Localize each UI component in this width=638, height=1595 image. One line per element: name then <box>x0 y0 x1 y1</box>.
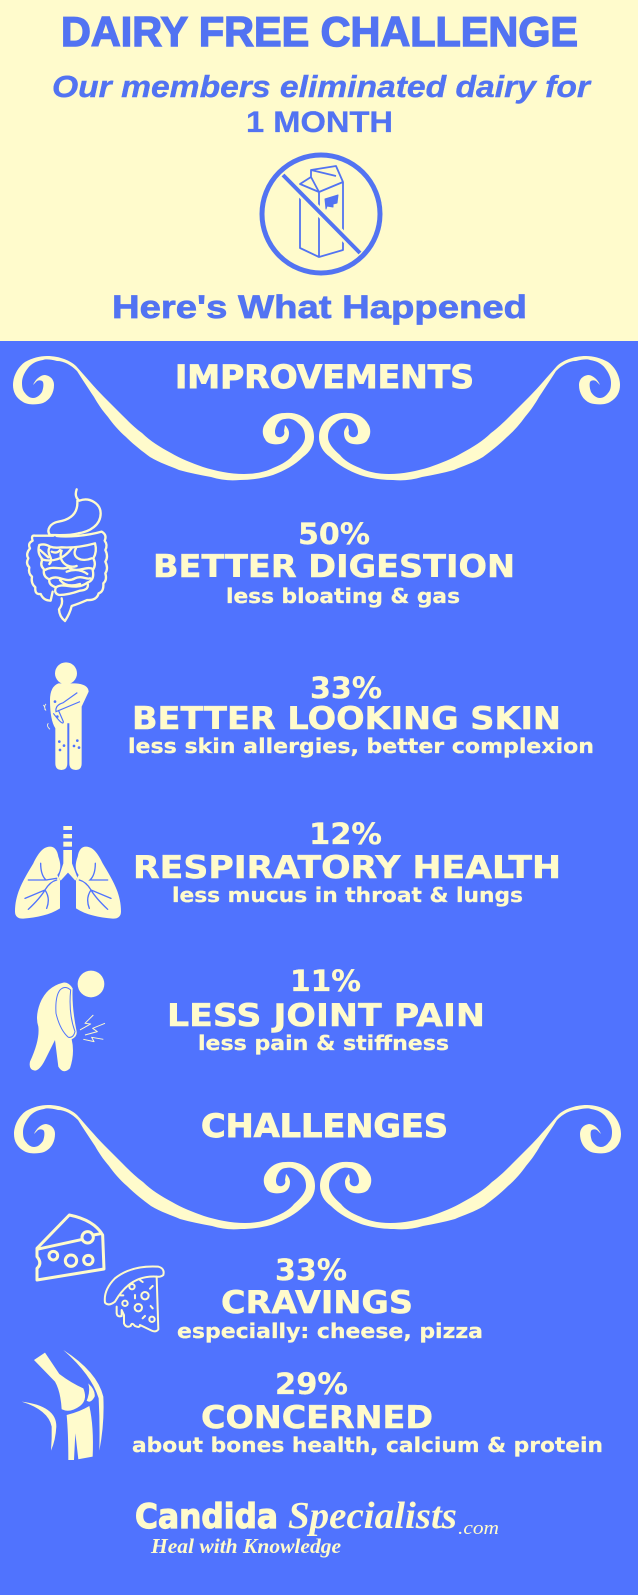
ornament: improvements left scroll <box>13 356 314 480</box>
percentage: 12% <box>309 817 382 851</box>
logo <box>135 1495 499 1558</box>
description: especially: cheese, pizza <box>177 1319 483 1343</box>
icon: cheese <box>37 1215 104 1280</box>
description: less bloating & gas <box>226 584 460 608</box>
heading: challenges: CHALLENGES <box>201 1107 448 1145</box>
label: RESPIRATORY HEALTH <box>133 850 561 886</box>
subheading: Here's What Happened <box>112 289 527 325</box>
icon: pizza <box>105 1266 164 1331</box>
label: CONCERNED <box>201 1400 433 1436</box>
logo: candida: Candida <box>135 1497 278 1537</box>
percentage: 29% <box>275 1367 348 1401</box>
ornament: challenges right scroll <box>320 1105 621 1229</box>
duration: 1 MONTH <box>246 106 393 139</box>
percentage: 33% <box>310 671 382 705</box>
panel: header <box>0 0 638 341</box>
panel: respiratory <box>15 817 561 919</box>
icon: knee joint <box>22 1350 104 1460</box>
panel: digestion <box>27 489 515 621</box>
icon: lungs <box>15 826 121 919</box>
ornament: improvements right scroll <box>319 356 620 480</box>
logo: specialists: Specialists <box>288 1495 457 1537</box>
panel: concerned <box>22 1350 603 1460</box>
icon: person with skin irritation <box>43 662 89 770</box>
panel: skin <box>43 662 594 770</box>
heading: improvements: IMPROVEMENTS <box>175 358 474 396</box>
description: less mucus in throat & lungs <box>172 883 523 907</box>
label: CRAVINGS <box>221 1285 413 1321</box>
label: LESS JOINT PAIN <box>167 998 485 1034</box>
icon: intestines <box>27 489 107 621</box>
panel: cravings <box>37 1215 483 1343</box>
ornament: challenges left scroll <box>14 1105 315 1229</box>
icon: no milk carton <box>262 155 380 273</box>
panel: joint pain <box>30 964 485 1071</box>
logo: domain: .com <box>458 1518 499 1539</box>
percentage: 11% <box>290 964 361 998</box>
icon: person with back pain <box>30 971 105 1071</box>
description: less pain & stiffness <box>198 1031 449 1055</box>
percentage: 33% <box>275 1253 347 1287</box>
description: less skin allergies, better complexion <box>128 734 594 758</box>
percentage: 50% <box>298 517 370 551</box>
description: about bones health, calcium & protein <box>132 1433 603 1457</box>
title: DAIRY FREE CHALLENGE <box>61 8 578 55</box>
label: BETTER LOOKING SKIN <box>132 701 561 737</box>
logo: tagline: Heal with Knowledge <box>150 1534 341 1558</box>
subtitle: Our members eliminated dairy for <box>52 69 592 104</box>
label: BETTER DIGESTION <box>153 549 515 585</box>
